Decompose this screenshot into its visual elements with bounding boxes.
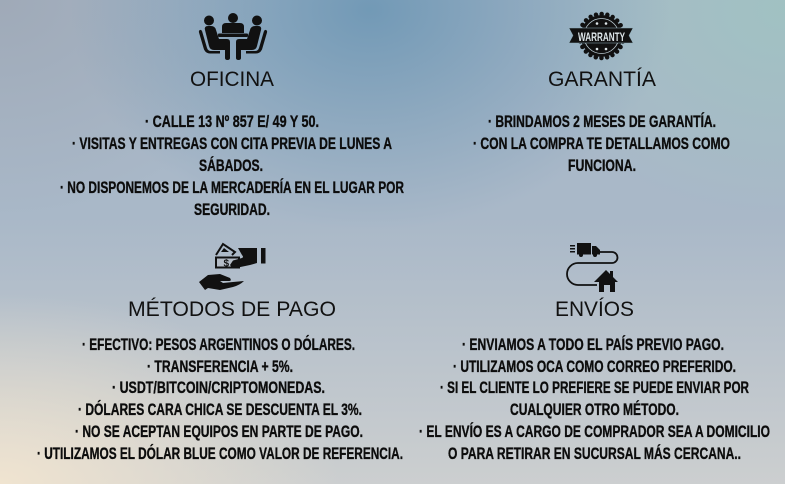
text block: métodos de pago: · DÓLARES CARA CHICA SE DESCUENTA EL 3%. <box>78 400 362 419</box>
text block: oficina: · CALLE 13 Nº 857 E/ 49 Y 50. <box>145 113 319 131</box>
panel: métodos de pago <box>37 244 403 463</box>
text block: envíos <box>419 335 770 463</box>
icon: warranty badge <box>569 14 633 58</box>
icon: meeting at table <box>199 13 267 60</box>
text block: oficina: · NO DISPONEMOS DE LA MERCADERÍA EN EL LUGAR POR <box>60 178 404 197</box>
panel: oficina <box>60 13 404 219</box>
heading: oficina: OFICINA <box>190 68 274 91</box>
text block: métodos de pago: · USDT/BITCOIN/CRIPTOMONEDAS. <box>112 379 325 397</box>
text block: garantía <box>473 112 730 175</box>
panel: garantía <box>473 14 730 175</box>
panel: envíos <box>419 243 770 463</box>
text block: garantía: FUNCIONA. <box>568 157 636 175</box>
text block: oficina: · VISITAS Y ENTREGAS CON CITA PREVIA DE LUNES A <box>72 135 392 153</box>
text block: oficina: SEGURIDAD. <box>194 201 270 219</box>
text block: oficina: SÁBADOS. <box>199 156 263 175</box>
text block: envíos: CUALQUIER OTRO MÉTODO. <box>510 400 679 419</box>
heading: envíos: ENVÍOS <box>555 298 634 321</box>
text block: métodos de pago <box>37 335 403 463</box>
text block: métodos de pago: · EFECTIVO: PESOS ARGENTINOS O DÓLARES. <box>82 335 355 354</box>
text block: métodos de pago: · UTILIZAMOS EL DÓLAR BLUE COMO VALOR DE REFERENCIA. <box>37 444 403 463</box>
icon: hands exchanging money <box>199 244 266 290</box>
text block: oficina <box>60 113 404 219</box>
heading: garantía: GARANTÍA <box>548 68 656 91</box>
text block: métodos de pago: · TRANSFERENCIA + 5%. <box>147 358 293 376</box>
icon: hands exchanging money: $ <box>224 258 230 270</box>
icon: warranty badge: WARRANTY <box>578 30 625 44</box>
text block: métodos de pago: · NO SE ACEPTAN EQUIPOS EN PARTE DE PAGO. <box>75 423 363 441</box>
icon: truck route to house <box>567 243 618 292</box>
heading: métodos de pago: MÉTODOS DE PAGO <box>128 298 336 321</box>
